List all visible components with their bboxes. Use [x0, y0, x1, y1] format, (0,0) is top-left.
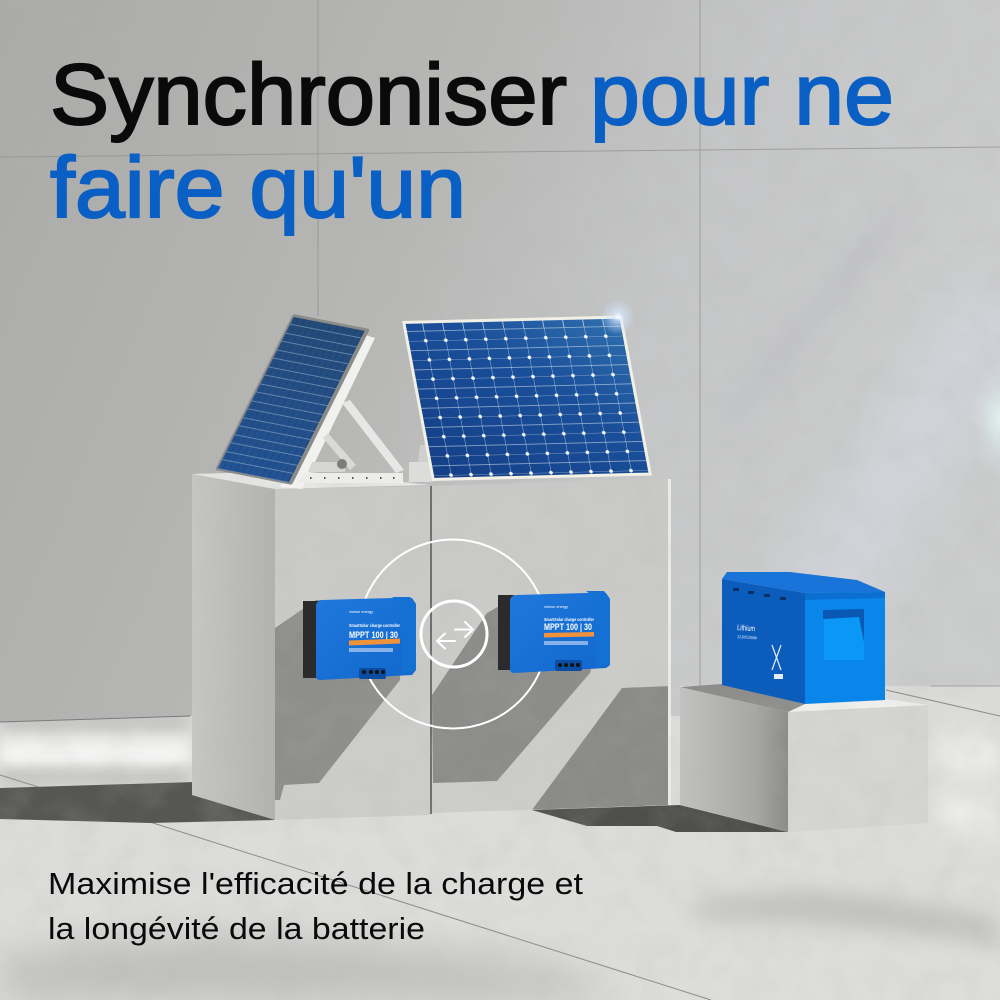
subtitle — [48, 866, 583, 946]
right concrete plinth — [680, 684, 928, 832]
lithium battery: 12,8V/100Ah — [737, 634, 758, 640]
subtitle: la longévité de la batterie — [48, 911, 425, 946]
title: pour ne — [590, 47, 894, 143]
sync icon: circle with two arrows — [421, 601, 487, 667]
concrete wall background — [0, 0, 1000, 730]
left MPPT charge controller: MPPT 100 | 30 — [349, 630, 398, 640]
title — [50, 47, 894, 236]
sun glare on panel corner — [600, 299, 636, 335]
concrete floor — [0, 686, 1000, 1000]
left MPPT charge controller: SmartSolar charge controller — [349, 623, 400, 628]
lithium battery: Lithium — [737, 623, 756, 633]
sync ring connecting the controllers — [358, 540, 548, 728]
left MPPT charge controller: victron energy — [349, 609, 373, 614]
lithium battery — [722, 572, 885, 704]
subtitle: Maximise l'efficacité de la charge et — [48, 866, 583, 901]
left MPPT charge controller — [303, 597, 416, 680]
right MPPT charge controller — [498, 591, 610, 673]
left solar panel with tilt stand — [215, 314, 404, 489]
left concrete plinth — [192, 471, 430, 820]
floor cast shadows — [0, 782, 788, 832]
title: faire qu'un — [50, 140, 466, 236]
right MPPT charge controller: SmartSolar charge controller — [544, 617, 594, 622]
centre concrete plinth — [431, 478, 671, 814]
right MPPT charge controller: victron energy — [544, 604, 568, 609]
right MPPT charge controller: MPPT 100 | 30 — [544, 622, 592, 632]
title: Synchroniser — [50, 47, 567, 143]
right solar panel — [402, 316, 652, 482]
